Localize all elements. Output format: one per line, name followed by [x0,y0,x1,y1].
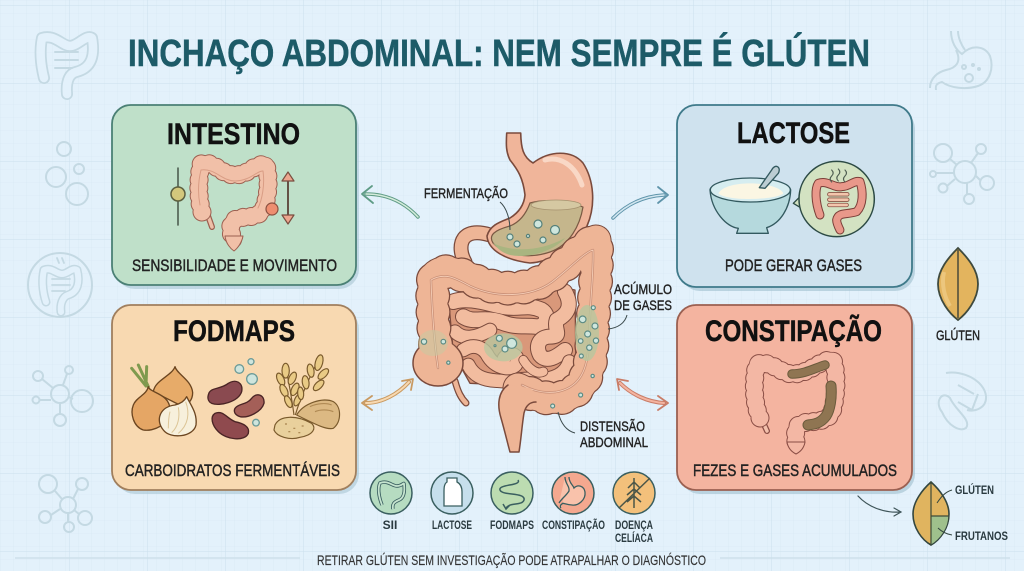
label: distensão abdominal [558,412,648,450]
label: acúmulo de gases [608,281,672,329]
diagram: grain with glúten and frutanos [913,482,1008,545]
legend icon: lactose [431,472,473,514]
label: acúmulo de gases: DE GASES [614,297,672,313]
legend labels: FODMAPS [490,518,534,532]
legend labels: LACTOSE [432,518,472,532]
background icon: molecule right [930,144,994,204]
caption: fodmaps: CARBOIDRATOS FERMENTÁVEIS [125,461,340,480]
icon: gluten grain [938,248,978,320]
arrow: to grain diagram [858,496,901,516]
panel: constipação [677,305,915,494]
footer note: RETIRAR GLÚTEN SEM INVESTIGAÇÃO PODE ATRAPALHAR O DIAGNÓSTICO [317,552,706,568]
legend labels: CONSTIPAÇÃO [542,517,605,532]
legend icon: fodmaps [491,472,533,514]
label: distensão abdominal: ABDOMINAL [580,434,648,450]
background icon: molecule lower left [39,475,92,532]
panel: intestino [112,105,359,289]
label: distensão abdominal: DISTENSÃO [580,418,645,434]
legend icon: constipação [552,472,594,514]
footer rules [15,557,1010,559]
label: frutanos part: FRUTANOS [955,529,1008,543]
background icon: digestive swirl right [939,372,986,429]
icon: beans [208,381,264,439]
icon: onions [132,365,196,436]
background icon: bubbles [46,142,88,205]
caption: lactose: PODE GERAR GASES [725,256,862,275]
legend labels: DOENÇA [615,518,653,532]
legend labels [383,517,653,545]
legend labels: CELÍACA [615,530,653,545]
central digestive system illustration [413,133,599,452]
icon: colon with sensitivity markers [171,163,294,251]
background icon: stomach top right [930,31,992,90]
legend icon: doença celíaca [613,472,655,514]
label: fermentação: FERMENTAÇÃO [424,185,508,201]
label: acúmulo de gases: ACÚMULO [614,281,672,297]
panel: fodmaps [112,305,359,494]
panel: lactose [677,105,915,291]
stomach [487,133,593,263]
legend icon: sii [370,472,412,514]
icon: gas bubbles [235,359,259,426]
heading: constipação: CONSTIPAÇÃO [705,314,882,348]
small intestine [448,287,576,387]
label: glúten part: GLÚTEN [955,482,994,497]
icon: bowl of milk [710,166,791,233]
caption: intestino: SENSIBILIDADE E MOVIMENTO [132,256,337,275]
background icon: colon top left [41,37,93,94]
heading: lactose: LACTOSE [737,117,850,150]
caption: constipação: FEZES E GASES ACUMULADOS [693,461,897,480]
background icon: circled colon [28,253,92,317]
icon: speech bubble with colon [793,161,874,237]
label: glúten: GLÚTEN [936,327,980,343]
title: INCHAÇO ABDOMINAL: NEM SEMPRE É GLÚTEN [128,31,870,75]
icon: colon with stool [754,360,836,454]
legend labels: SII [383,518,397,532]
heading: fodmaps: FODMAPS [173,315,295,348]
label: fermentação [424,185,510,230]
arrow: to intestino [362,186,418,217]
rectum [499,385,548,452]
duodenum [461,233,490,262]
background icon: molecule left [32,366,93,426]
arrow: to lactose [613,187,668,218]
heading: intestino: INTESTINO [167,118,300,151]
colon [413,240,599,452]
icon: wheat and bread [274,354,340,439]
arrow: constipação both ways [617,379,668,410]
gas bubbles in the intestine [421,306,599,408]
arrow: fodmaps both ways [362,379,413,410]
